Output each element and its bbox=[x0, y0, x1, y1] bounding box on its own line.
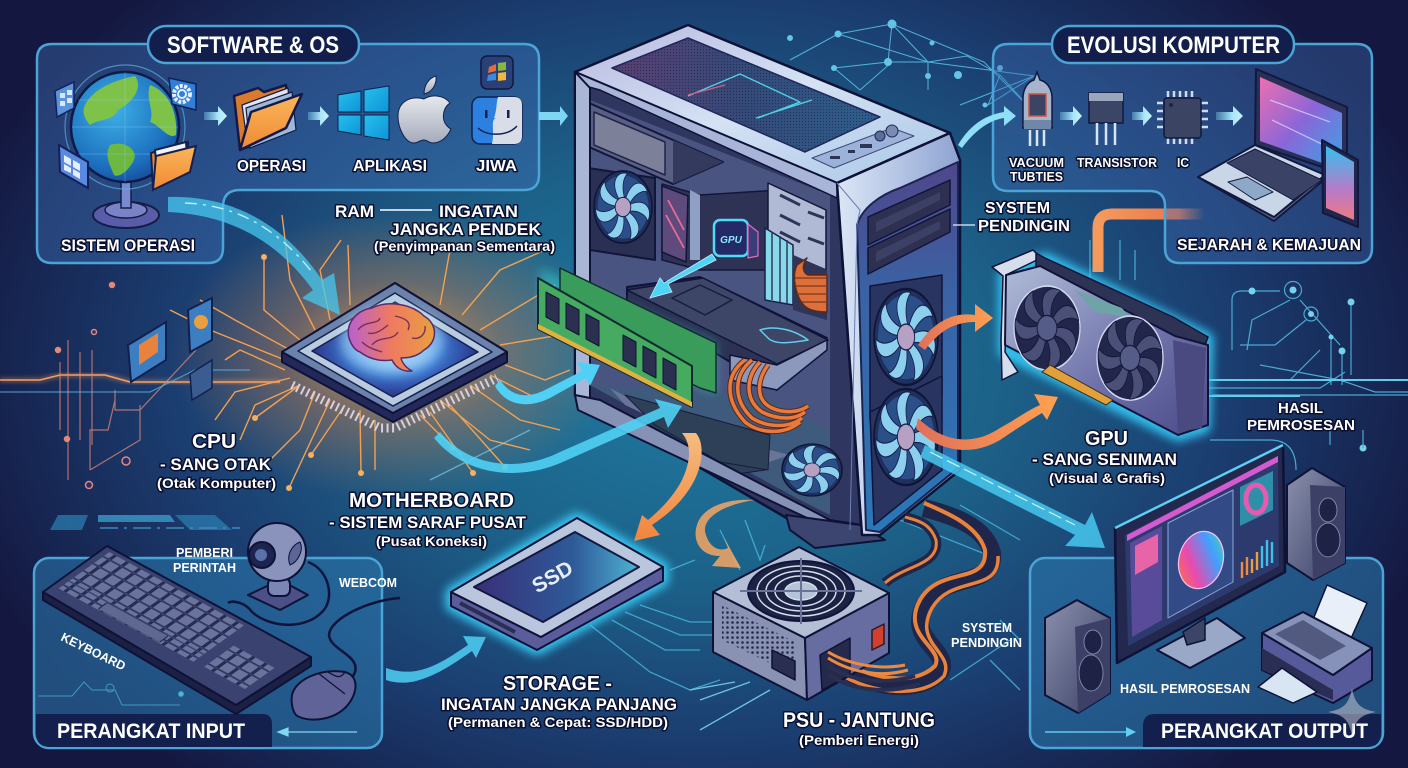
arrow: input to SSD bbox=[386, 636, 486, 683]
icon: printer bbox=[1258, 585, 1372, 703]
pill: evolusi komputer bbox=[1052, 26, 1294, 63]
PSU: cable port bbox=[820, 638, 850, 690]
label: GPU: (Visual & Grafis) bbox=[1049, 470, 1165, 486]
label: CPU: CPU bbox=[192, 431, 236, 453]
case: orange coil bbox=[794, 258, 827, 312]
icon: tile card bbox=[59, 145, 88, 188]
arrow bbox=[204, 106, 227, 126]
monitor: bar chart bbox=[1242, 540, 1272, 578]
CPU: base bbox=[282, 283, 507, 422]
watermark sparkle bbox=[1328, 688, 1376, 736]
GPU: fan left bbox=[1004, 271, 1091, 381]
panel: perangkat input bbox=[34, 558, 382, 748]
label: sejarah & kemajuan: SEJARAH & KEMAJUAN bbox=[1177, 237, 1361, 254]
icon: apple logo bbox=[398, 76, 451, 143]
label: sistem operasi: SISTEM OPERASI bbox=[61, 236, 195, 255]
monitor: sidebar bbox=[1130, 526, 1162, 637]
PSU: switch bbox=[872, 624, 884, 650]
label: RAM: (Penyimpanan Sementara) bbox=[374, 238, 555, 254]
GPU: gold connector bbox=[1042, 365, 1113, 405]
label: perangkat input: PERANGKAT INPUT bbox=[57, 720, 245, 743]
PSU: right face bbox=[805, 593, 889, 700]
circuit lines: orange CPU traces bbox=[0, 210, 620, 500]
icon: folder bbox=[234, 85, 302, 150]
label: RAM: JANGKA PENDEK bbox=[390, 220, 542, 239]
icon: speaker right bbox=[1287, 468, 1345, 580]
PSU: fan grille bbox=[740, 558, 862, 624]
monitor: screen bbox=[1125, 456, 1279, 646]
pill: software & os bbox=[148, 26, 359, 63]
arrow bbox=[1216, 106, 1243, 126]
case: AIO cooler block bbox=[714, 220, 758, 258]
case: rear fan bbox=[588, 168, 655, 260]
label: CPU: - SANG OTAK bbox=[160, 455, 272, 474]
cable: webcam and mouse bbox=[228, 562, 400, 690]
label: hasil pemrosesan (upper): HASIL bbox=[1278, 400, 1323, 417]
label: keyboard: KEYBOARD bbox=[59, 630, 128, 673]
label: motherboard: - SISTEM SARAF PUSAT bbox=[329, 513, 527, 532]
arrow: fan to GPU (upper) bbox=[918, 304, 993, 350]
monitor: center chart panel bbox=[1168, 490, 1233, 618]
icon: speaker left bbox=[1045, 600, 1110, 713]
PSU: left face bbox=[713, 592, 807, 700]
case: top face bbox=[575, 25, 950, 183]
arrow bbox=[308, 106, 329, 126]
PSU: power socket bbox=[772, 650, 795, 680]
arrow: case to PSU bbox=[696, 500, 755, 568]
PSU cables bbox=[826, 503, 998, 691]
label: PSU: (Pemberi Energi) bbox=[799, 732, 919, 748]
arrow: fan to GPU (lower) bbox=[916, 394, 1058, 450]
GPU: shroud bbox=[1005, 266, 1208, 435]
icon: vacuum tube bbox=[1023, 72, 1052, 146]
label: CPU bbox=[157, 431, 276, 491]
label: hasil pemrosesan (output): HASIL PEMROSESAN bbox=[1120, 681, 1250, 696]
label: IC: IC bbox=[1177, 155, 1190, 170]
circuit: right side bbox=[1090, 240, 1408, 470]
SSD: glow bbox=[451, 518, 663, 650]
label: system pendingin (upper) bbox=[953, 200, 1070, 235]
arrow: OS to CPU bbox=[168, 197, 340, 315]
front: fan upper bbox=[870, 275, 942, 420]
SSD: label: SSD bbox=[528, 557, 577, 598]
label: vacuum tubties line 2: TUBTIES bbox=[1010, 169, 1063, 184]
label: GPU: - SANG SENIMAN bbox=[1032, 450, 1177, 469]
arrow: cooler to motherboard bbox=[650, 254, 716, 298]
case: foot bbox=[786, 515, 885, 548]
front: fan lower bbox=[870, 376, 942, 525]
case: motherboard area bbox=[662, 183, 827, 320]
label: aplikasi: APLIKASI bbox=[353, 158, 427, 175]
arrow: cooling pipe orange bbox=[1098, 214, 1205, 272]
label: motherboard: MOTHERBOARD bbox=[349, 490, 514, 512]
icon: brain bbox=[340, 304, 444, 375]
label: hasil pemrosesan (upper) bbox=[1247, 400, 1355, 434]
GPU: glow bbox=[1004, 258, 1208, 436]
label: transistor: TRANSISTOR bbox=[1077, 155, 1158, 170]
label: RAM bbox=[335, 202, 555, 254]
icon: windows logo bbox=[338, 86, 389, 140]
label: system pendingin (lower) bbox=[951, 620, 1022, 650]
arrow: left in input panel bbox=[278, 728, 357, 736]
arrow: CPU to RAM bbox=[495, 362, 600, 404]
RAM: front module bbox=[538, 278, 692, 407]
icon: small folder bbox=[151, 142, 196, 190]
icon: small window card bbox=[55, 82, 74, 117]
label: system pendingin (lower): SYSTEM bbox=[962, 620, 1012, 635]
icon: mouse bbox=[292, 671, 356, 720]
CPU chip bbox=[282, 283, 507, 428]
SSD bbox=[451, 518, 663, 650]
arrow: case to evolusi bbox=[958, 106, 1016, 148]
icon: small windows badge bbox=[481, 56, 513, 89]
PSU bbox=[713, 547, 920, 700]
graphics card GPU bbox=[992, 250, 1208, 436]
label: pemberi perintah bbox=[173, 546, 236, 575]
label: motherboard bbox=[329, 490, 527, 549]
keyboard: key grid bbox=[59, 552, 295, 689]
PSU: top face bbox=[713, 547, 889, 638]
panel: perangkat output bbox=[1030, 558, 1383, 748]
RAM module bbox=[538, 268, 716, 407]
RAM: back module bbox=[560, 268, 716, 393]
case: bottom fan and floor bbox=[590, 385, 843, 515]
SSD: top bbox=[451, 518, 663, 637]
circuit network: top centre nodes bbox=[787, 20, 1037, 110]
case: interior bbox=[575, 72, 862, 538]
label: perangkat output: PERANGKAT OUTPUT bbox=[1161, 720, 1368, 743]
case: orange cables bbox=[730, 360, 808, 431]
CPU: top bbox=[282, 283, 507, 413]
label: system pendingin (lower): PENDINGIN bbox=[951, 635, 1022, 650]
case: front panel bbox=[837, 133, 960, 535]
pill: evolusi komputer: EVOLUSI KOMPUTER bbox=[1067, 32, 1280, 59]
icon: transistor bbox=[1089, 93, 1123, 145]
SSD: side bbox=[451, 567, 663, 650]
monitor: stand bbox=[1157, 618, 1245, 668]
case: upper rail bbox=[575, 72, 837, 198]
label: hasil pemrosesan (upper): PEMROSESAN bbox=[1247, 417, 1355, 434]
label: storage bbox=[441, 673, 677, 730]
arrow: right in output panel bbox=[1045, 727, 1136, 737]
label: RAM: RAM bbox=[335, 202, 374, 221]
label: storage: STORAGE - bbox=[503, 673, 612, 695]
label: pemberi perintah: PERINTAH bbox=[173, 561, 236, 575]
icon: monitor bbox=[1115, 445, 1285, 668]
icon: globe bbox=[65, 65, 185, 228]
case: installed graphics card bbox=[627, 277, 828, 390]
label: GPU: GPU bbox=[1085, 428, 1128, 450]
GPU: fan right bbox=[1087, 301, 1174, 411]
circuit: input panel bbox=[38, 682, 184, 705]
case: bottom rail bbox=[575, 395, 862, 538]
monitor: color wheel tile bbox=[1240, 471, 1273, 526]
CPU: die bbox=[312, 302, 478, 397]
monitor: bezel bbox=[1115, 445, 1285, 663]
label: motherboard: (Pusat Koneksi) bbox=[376, 533, 487, 549]
arrow: motherboard to case bbox=[434, 399, 682, 473]
arrow bbox=[1060, 106, 1082, 126]
icon: laptop bbox=[1198, 69, 1347, 221]
label: pemberi perintah: PEMBERI bbox=[176, 546, 233, 560]
label: system pendingin (upper): SYSTEM bbox=[985, 200, 1050, 217]
icon: IC chip bbox=[1157, 91, 1208, 144]
circuit: bottom centre bbox=[430, 430, 1020, 730]
icon cards: left of CPU bbox=[128, 298, 212, 400]
icon: phone bbox=[1322, 140, 1358, 227]
arrow: software to case bbox=[539, 106, 568, 126]
label: RAM: INGATAN bbox=[439, 202, 518, 221]
computer case bbox=[575, 25, 960, 548]
label: webcom: WEBCOM bbox=[339, 575, 397, 590]
case: motherboard lower bbox=[625, 395, 770, 470]
label: PSU bbox=[783, 709, 935, 748]
label: jiwa: JIWA bbox=[476, 158, 517, 175]
case: upper drive box bbox=[589, 103, 723, 184]
label: perangkat input bbox=[36, 714, 272, 747]
label: perangkat output bbox=[1143, 714, 1381, 747]
icon: webcam bbox=[248, 523, 308, 610]
front: drive bays bbox=[868, 180, 950, 274]
label: PSU: PSU - JANTUNG bbox=[783, 709, 935, 732]
label: storage: (Permanen & Cepat: SSD/HDD) bbox=[448, 714, 668, 730]
keyboard bbox=[43, 546, 311, 714]
label: vacuum tubties: VACUUM bbox=[1009, 155, 1064, 170]
label: storage: INGATAN JANGKA PANJANG bbox=[441, 695, 677, 714]
icon: finder bbox=[472, 97, 522, 144]
label: system pendingin (upper): PENDINGIN bbox=[978, 218, 1070, 235]
arrow: case to monitor bbox=[920, 445, 1105, 548]
case: back panel shading bbox=[590, 100, 830, 500]
GPU: top strip with connector bbox=[1036, 253, 1208, 348]
panel: software & os bbox=[37, 26, 539, 263]
GPU: bracket bbox=[992, 250, 1041, 380]
icon: gear card bbox=[169, 78, 196, 110]
decor: tabs above input bbox=[50, 515, 240, 530]
label: operasi: OPERASI bbox=[237, 158, 306, 175]
case: AIO cooler block: GPU bbox=[720, 235, 743, 246]
pill: software & os: SOFTWARE & OS bbox=[167, 32, 339, 59]
arrow: case to SSD bbox=[634, 433, 702, 541]
case: left frame bbox=[575, 72, 590, 400]
label: CPU: (Otak Komputer) bbox=[157, 475, 276, 491]
panel: evolusi komputer bbox=[993, 26, 1372, 263]
arrow bbox=[1132, 106, 1152, 126]
label: GPU bbox=[1032, 428, 1177, 486]
